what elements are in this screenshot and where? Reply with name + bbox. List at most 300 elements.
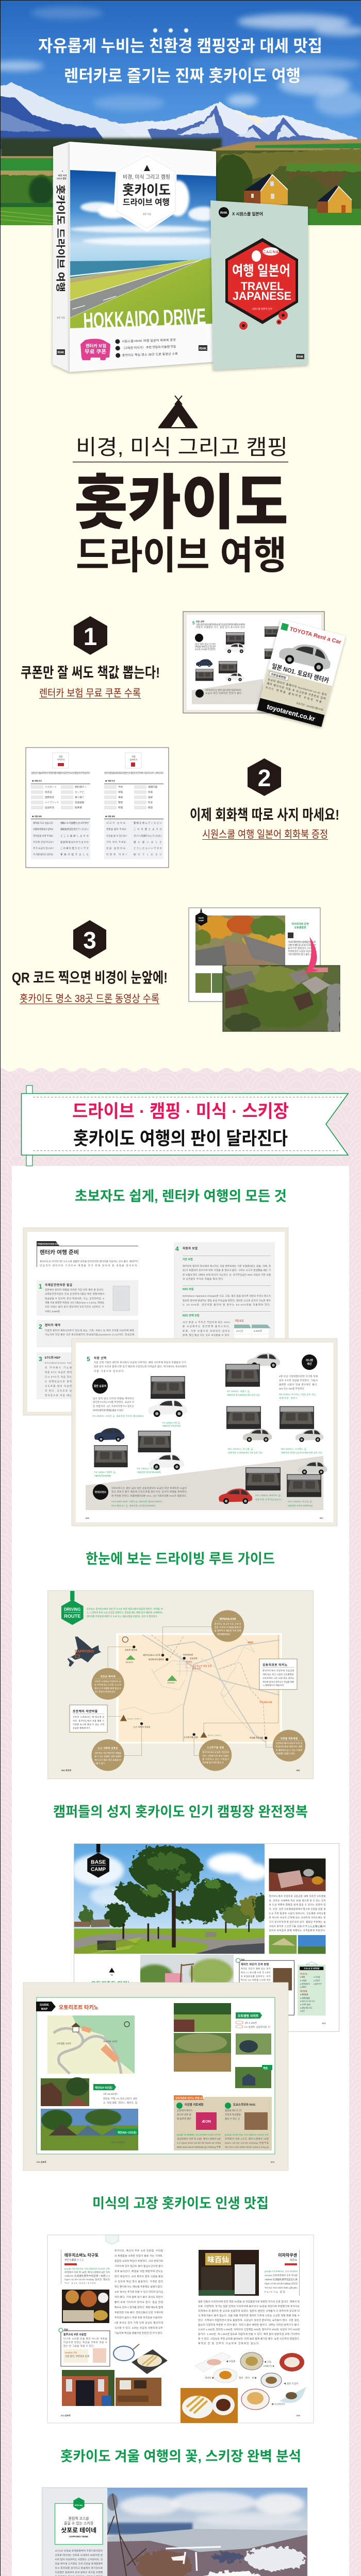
pink patterned section: [0, 1068, 361, 2576]
area map: [116, 1633, 282, 1743]
section 2: 2: [39, 1323, 42, 1330]
red hexagon: こんにちは: [263, 250, 278, 254]
book page preview: 차종 선택: [196, 620, 204, 623]
page title: [37, 1241, 138, 1267]
area map: 스스키노의 맛집 밀집: [192, 1664, 212, 1667]
right text block: 할 수 있다. 사장님의 추천 요리를 물어보자. 지역 술과 함께 즐기면 좋다. 늦은 시간까지 영업한다.: [198, 2337, 300, 2341]
spread preview: 追加料金: [45, 806, 55, 809]
left restaurant title: Open 11:00~15:00 Holiday 일요일, 월요일: [64, 2278, 110, 2281]
section 4 insurance: 가입 요금: [235, 1319, 243, 1323]
compact car group: 짐이 많지 않고 단거리 여행을 계획하고: [93, 1397, 134, 1400]
compact car group: P3 1500cc 아반떼 급,: [137, 1467, 161, 1470]
auto camping site info: [235, 2012, 272, 2088]
tip box: 이용하면 맛있는 튀김을 무료로 먹을 수: [63, 2341, 107, 2344]
compact car group: 있다면 P1이나 P2를 추천한다. 요금이 가: [93, 1400, 135, 1404]
body text: 만 아니라 서로가 근처에 있는 프라이빗 사이트에도 잔: [269, 1916, 325, 1920]
section 4 insurance: 사고 발생 시 무조건 부담하게 되는 NOC: [183, 1320, 231, 1324]
compact car group: 되어야 편하게 여행을 즐길 수 있다.: [93, 1409, 124, 1412]
area map: 스즈란구릉 공원: [184, 1735, 198, 1738]
section 4 insurance: NOC(None Operation Charge)란 사고, 고장, 펑크 등을 일으켜 차량의 수리나 청소가: [183, 1294, 271, 1298]
driving route map page: 063: [297, 1769, 300, 1772]
shop exterior photo: [62, 2370, 161, 2406]
section 2: 가능하며 가장 좋은 것은 토요타렌터카 한국대리점(toyotarent.co.kr)이다. 한국인에: [45, 1333, 134, 1336]
section 4 insurance: 토해, 기본 보험으로 커버되지 않아도: [183, 1329, 230, 1333]
guide map label: MAP: [41, 2008, 47, 2011]
tip box: 블루스틱 쿠폰 사용법: [63, 2333, 87, 2336]
area map: 테우치소바노 타구토: [143, 1653, 161, 1656]
section 4 insurance: 8,300엔: [254, 1329, 262, 1332]
flowers: [239, 311, 288, 330]
section 2: [37, 1320, 138, 1347]
cover feature list: 시원스쿨×RHK 여행 일본어 회화북 증정: [122, 338, 176, 344]
nearby recommendation panel: 도요스쿠모아 HUG: [233, 2103, 255, 2107]
hybrid band: HV4 제네시스 급, 대표차량 크라운(CROWN): [111, 1504, 156, 1507]
section 4 insurance: 자동차 보험: [183, 1246, 198, 1250]
auto camping site info: 1박 4,100엔: [244, 2021, 257, 2025]
driving route badge: DRIVING: [64, 1607, 80, 1612]
spread preview: 추가 요금이 있나요?: [33, 846, 54, 850]
info box: Auto Resort Takino: 홋카이도에서 유일하게 국립공원: [262, 1669, 294, 1672]
spread preview: 렌터카를 빌릴 때 보험과 관련된 단어를 알아두면 매우 유용하다 반드시 확인하자: [104, 771, 164, 775]
facilities panel: ● 매점: [300, 1976, 305, 1978]
title block: [73, 396, 288, 577]
callout circle: Suzuran park: 를 마련하고 있는 가족들이: [202, 1757, 229, 1760]
spread preview: 가득 넣어 주세요.: [106, 840, 127, 844]
tip box: Monthly 쿠폰: [65, 2351, 77, 2354]
left column text: 적인 편이며 어느 메뉴를 주문해도 실패가 없다.: [114, 2285, 163, 2289]
info box: Auto Resort Takino: 삿포로에서 시로 30분 정도 걸리는: [262, 1676, 294, 1680]
compact car group: 대표차량 탱크(TANK): [94, 1474, 111, 1478]
section 1: 국제운전면허증 발급: [45, 1283, 72, 1287]
info box: Jozankei village: 삿포로 시내에서는 꽤 멀리에 있: [73, 1715, 105, 1718]
spread preview: ◆ 여행 회화: [105, 815, 116, 818]
section 1: 일본에서 렌터카 여행을 하려면 가장 먼저 해야 할 일이다.: [45, 1288, 104, 1292]
minivan group: W3 2400cc 스타렉스 급,: [281, 1447, 307, 1451]
right restaurant door photo: [199, 2250, 259, 2296]
publisher mark: RHK: [220, 211, 227, 215]
publisher mark: X 시원스쿨 일본어: [232, 211, 263, 216]
left column text: 의 특별함을 내세운 맛집이 줄을 서는 가게로,: [114, 2254, 163, 2258]
section 1: 개월 이내 촬영한 여권용 사진 1매(3.5cm x 4.5cm), 여권용: [45, 1301, 104, 1304]
rental car flyer: 일본 NO1. 토요타 렌터카: [271, 662, 330, 684]
Teine title box: 삿포로 테이네: [61, 2527, 96, 2534]
facilities panel: ● 바베큐용품: [300, 1996, 310, 1999]
sub heading: 홋카이도 명소 38곳 드론 동영상 수록: [20, 993, 159, 1005]
left restaurant title: Address 北海道札幌市中央区南一条西 2-2: [64, 2274, 110, 2278]
section 4 insurance: 과 상관없이 추가로 지불을 해야 한다.: [183, 1277, 224, 1281]
callout circle: Aeon mall: 장 예정에서 살 수 있는 다양한: [276, 1748, 303, 1751]
banner line 2: 홋카이도 여행의 판이 달라진다: [73, 1129, 288, 1149]
left column text: [114, 2249, 163, 2335]
minivan group: W2 2000cc 카니발 급,: [228, 1447, 254, 1451]
callout circle: Sapporo Teine: 삿포로 테이네: [101, 1675, 116, 1679]
hexagon number 1: [74, 616, 107, 655]
hybrid band: HV3 2400 2500 그랜저 급, 대표차량 캠리(CAMRY): [111, 1500, 162, 1503]
park photo: [71, 1844, 268, 1954]
page title: 홋카이도의 아기자기한 소도시와 광활한 자연을 만끽하려면 렌터카를 이용하는 것이 좋다. 예약부터: [40, 1260, 138, 1263]
right restaurant info: Tel 011-716-1000 Web ajihyaku: [265, 2286, 298, 2289]
callout circle: Teuchi soba: 을 제작하기 때문에 하루 판매: [215, 1629, 241, 1632]
body text: [269, 1894, 325, 1933]
spread preview: ◆ 여행 회화: [32, 815, 42, 818]
compact car group: 장 저렴하다. 4인 가족이라면 P4 정도는: [93, 1404, 134, 1408]
body text: 홋카이도에서 유일하게 국립공원 내에 자리한 오토캠핑: [269, 1894, 325, 1898]
nearby recommendation panel: google 42.828055, 141.674505 Access 신치토: [177, 2133, 221, 2137]
hexagon number 3: 3: [83, 927, 96, 954]
page background cream: [0, 0, 361, 1077]
restaurant page: 075: [297, 2414, 300, 2417]
book spine: 홋카이도 드라이브 여행: [55, 184, 65, 292]
spread preview: ハイブリッド: [45, 801, 59, 804]
left restaurant title: [61, 2235, 119, 2284]
izakaya dishes: 청어 · 연어 · 게 ▶: [239, 2376, 257, 2380]
info box: Jozankei village: 키장을 동시에 즐길 수 있는 거의: [73, 1723, 105, 1726]
left column text: 홋카이도, 특산의 우유 소바 전문점. 수타법: [114, 2249, 163, 2252]
page with autumn photo: BASE: [199, 917, 204, 919]
minivan group: 량이 우수한 차량을 추천한다. 거동이: [279, 1379, 318, 1382]
callout circle: Aeon mall: [273, 1730, 305, 1761]
page with autumn photo: CAMP: [199, 920, 204, 922]
small photos: [269, 1935, 325, 1954]
hexagon number 1: 1: [84, 623, 97, 651]
izakaya dishes: ◀ 삶은 오징어: [284, 2382, 298, 2385]
book page preview: P1이나 P2를 추천한다: [195, 648, 216, 651]
book: Travel Japanese: RHK: [297, 355, 304, 359]
spread preview: 어떻게 하죠?: [106, 853, 127, 856]
section 3: 지 된다. 고속도로 등: [45, 1389, 72, 1393]
nearby recommendation panel: 때 들르면 좋은: [177, 2117, 191, 2121]
section 2: 다양한 렌터카 예약사이트가 있는데 성능, 가격, 서비스 등 여러 가지를 비교하여 예약: [45, 1329, 135, 1332]
guide map page: 073: [271, 2161, 274, 2163]
section 1: 1: [39, 1283, 42, 1290]
callout circle: Aeon mall: 때 들르면 좋은 대형 마트. 캠핑: [276, 1745, 303, 1748]
chalet photo 1: [41, 2077, 89, 2106]
cover title hexagon: [115, 156, 175, 230]
book page preview: 짐이 많지 않고 단거리: [195, 642, 216, 646]
callout circle: North Safari: 할 수 있는 동물원. 일반 동물원: [94, 1755, 121, 1758]
nearby recommendation panel: Web www.aeon-hokkaido.jp Parking 무료: [177, 2146, 221, 2149]
chalet label: 고, 취침 램프, 테라스, 베란다, 침: [103, 2101, 137, 2105]
heading: campsites: 캠퍼들의 성지 홋카이도 인기 캠핑장 완전정복: [53, 1804, 308, 1820]
section 4 insurance: 손)가 포함되어 있으므로 따로 가입을 할 필요가 없다. 그러나 사고가 발생했을 때는 기: [183, 1268, 271, 1272]
chalet label: 1박 15,840엔~: [103, 2092, 118, 2096]
cover feature list: 홋카이도 핵심 명소 38곳 드론 동영상 수록: [122, 352, 178, 358]
vehicle selection page: 016: [86, 1517, 89, 1519]
coupon badge: 무료 쿠폰: [85, 349, 106, 355]
driving route badge: ROUTE: [64, 1614, 80, 1619]
right restaurant info: 味百仙: [290, 2258, 297, 2262]
teapot and tempura: [113, 2344, 168, 2374]
base camp page: [71, 1843, 339, 2031]
rental car flyer: [257, 619, 346, 727]
compact car group: 대표차량 비츠(VITZ): [162, 1424, 181, 1428]
cover feature list: [115, 337, 207, 358]
restaurant page: 074 삿포로: [61, 2414, 71, 2417]
right restaurant door photo: 味百仙: [207, 2256, 229, 2264]
hero headline: 자유롭게 누비는 친환경 캠핑장과 대세 맛집: [38, 37, 322, 55]
callout circle: Sapporo Teine: 있는 절호의 위치에 있다.: [94, 1690, 116, 1693]
right text block: [198, 2300, 300, 2345]
book page preview: 자동차 모델명과 크기, 정원 등이 표시되어 있다: [196, 625, 245, 629]
callout circle: Suzuran park: [199, 1739, 232, 1771]
spread preview: 免責: [148, 790, 153, 794]
section 3: ETC와 HEP: [45, 1355, 60, 1360]
hybrid band: 하이브리드: [94, 1490, 107, 1494]
section 4 insurance: 4: [175, 1245, 179, 1252]
intro text: 스, 노면전차 등이 도심 곳곳을 연결하고, 혼잡할 때도 제법 많기 때문에 시내에서는: [87, 1611, 163, 1615]
ski resort page: [42, 2487, 311, 2576]
spread preview: 검색하기: [130, 758, 138, 761]
callout circle: Sapporo Teine: 행과 스키 여행을 함께 즐길 수: [94, 1686, 121, 1689]
spread preview: 사고가 났어요.: [106, 821, 127, 825]
intro text: 차종 선택 기준은 렌터카 회사마다 조금씩 다르지만, 예약 사이트에 자동차 모델명과 크기,: [94, 1361, 187, 1364]
rental car flyer: 유효기간 : 2019년 6월 30일: [296, 701, 323, 712]
area map: 기타히로시마: [259, 1700, 272, 1703]
sub heading: 렌터카 보험 무료 쿠폰 수록: [39, 687, 141, 699]
feature 2: phrase book: [26, 748, 339, 868]
left column text: 수 있으며 튀김 역시 훌륭하다. 가격은 합리: [114, 2280, 163, 2283]
body text: 디가 골고루하게 잘 정돈되어 있다. 캠핑장 주변에는 놀: [269, 1920, 325, 1924]
section 4 insurance: 대부분의 렌터카 회사에서 제시하는 차량 렌트비에는 기본 보험료(대인, 대물, 차체, 자: [183, 1264, 271, 1268]
nearby recommendation panel: 1-2 Open 9:00~21:00 Tel 0123-24-3700: [177, 2142, 221, 2144]
spread preview: 예약을 하고 싶습니다.: [33, 821, 54, 825]
section 4 insurance: NOC 비용: [183, 1287, 194, 1291]
body text: 라 도심 여행과 캠핑을 쉽게 즐길 수 있다는 장점이 있: [269, 1903, 325, 1907]
red hexagon: 시원스쿨 일본어 감수: [252, 307, 272, 311]
info box: Auto Resort Takino: 시 캠핑장이기 때문이다.: [262, 1684, 285, 1687]
page with autumn photo: [189, 908, 320, 1002]
spread preview: 이 차를 빌리고 싶어요.: [33, 853, 54, 856]
body text: 삿포로 테이네는 삿포로 시내에서 40분이면 갈: [55, 2553, 103, 2557]
book spine: ▲: [61, 170, 63, 172]
hero headline: 렌터카로 즐기는 진짜 홋카이도 여행: [64, 66, 301, 85]
rental car flyer: NOC 면책을 클릭하면 무료로 적용: [265, 685, 322, 704]
section 4 insurance: 기본 보험: [183, 1258, 193, 1261]
restaurant page: [47, 2235, 314, 2423]
spread preview: 料金: [148, 801, 153, 804]
book front cover: [70, 142, 216, 372]
spread preview: 길을 잃었어요.: [106, 846, 127, 850]
spread preview: 保険: [118, 790, 123, 794]
spread preview: 事故: [118, 795, 123, 799]
spread preview: 修理: [118, 806, 123, 809]
section 4 insurance: 를 보상해주는 완전면책 플러스이다.: [183, 1325, 230, 1328]
izakaya dishes: 고래베이컨 ▶: [263, 2365, 275, 2367]
callout circle: Suzuran park: 하루를 즐기기에 좋은 곳: [202, 1761, 224, 1764]
cover title hexagon: 홋카이도: [122, 182, 171, 198]
spread preview: 보험에 대해 묻고 싶어요.: [33, 827, 54, 831]
hybrid band: HV2 2000cc 쏘나타 급,: [288, 1500, 313, 1503]
Teine title box: SAPPORO-TEINE: [69, 2535, 88, 2538]
Hokkaido silhouette: [68, 1637, 101, 1667]
right restaurant info: Access 삿포로역에서 도보 약 5분: [265, 2274, 298, 2277]
cover title hexagon: 봉윤 지음: [143, 212, 151, 215]
area map: 삿포로 테이네: [125, 1648, 137, 1651]
right photos: [174, 2003, 231, 2072]
book page preview: 요금이 약간 비싸지만 연비가 좋다: [205, 691, 242, 695]
site illustration map: 프라이빗 사이트: [103, 2040, 118, 2043]
compact car group: [92, 1376, 187, 1478]
area map: 마코마나이 렌터카: [149, 1657, 164, 1660]
callout circle: Sapporo Teine: 삿포로 시내에서 차량으로 40: [94, 1680, 122, 1683]
area map: 모이와야마: [168, 1681, 175, 1684]
spread preview: [26, 748, 169, 868]
area map: 밀집 구역: [192, 1667, 201, 1670]
area map: 이자하쿠센: [183, 1653, 193, 1656]
page title: 반납까지 렌터카로 드라이브 여행을 하기 위해 알아야 할 과정을 알아보자.: [40, 1264, 138, 1267]
spread preview: 발음: [59, 755, 63, 758]
page with autumn photo: 히사리가와 온천: [291, 922, 309, 926]
guide map page: [23, 1982, 288, 2171]
lower playground photo: [140, 1955, 234, 1982]
nearby recommendation panel: [174, 2095, 272, 2150]
minivan group: 왜건: [307, 1362, 312, 1366]
tip box: 있는 번 그림을 먹을 수 있다.: [63, 2344, 94, 2348]
section 3: ETC(Electronic Toll: [45, 1362, 72, 1364]
callout circle: Teuchi soba: 홋카이도 최고의 우유 소바 전: [215, 1622, 241, 1625]
spread preview: ◆ 여행 단어: [32, 779, 42, 782]
izakaya dishes: 야마모 ▶: [205, 2376, 215, 2380]
left column text: 길게 늘어선다. 메밀을 직접 제분하여 만드는: [114, 2269, 163, 2273]
spread preview: どうしたらいいですか: [134, 846, 162, 850]
tip box: [59, 2328, 110, 2366]
tip box: 게이트 차단기 옆에 있는 장치: [241, 1967, 271, 1970]
callout circle: North Safari: 나볼 수 있다.: [94, 1761, 105, 1765]
right restaurant info: [265, 2250, 300, 2296]
section 3: 는 정액요금으로 홋카: [45, 1380, 72, 1383]
cover title hexagon: 드라이브 여행: [123, 197, 170, 207]
intro text: [87, 1355, 187, 1373]
clouds: [0, 7, 361, 116]
tent icon and title: 01: [110, 1973, 113, 1976]
facilities panel: ● 샤워장: [300, 1979, 306, 1981]
callout circle: Aeon mall: 공항에서 메이스센으로 바로 갈: [276, 1741, 303, 1744]
info box: Auto Resort Takino: 위치에 있어서 찾아오는 손님들 위한: [262, 1680, 294, 1683]
compact car group: P1 1300cc 5인 급,: [162, 1421, 180, 1424]
book page preview: 하이브리드는 같은 급의 일반 승용차보다: [205, 688, 242, 692]
minivan group: 대표차량 알파드(ALPHARD) 8명 승차 가능: [281, 1451, 322, 1454]
nearby recommendation panel: 캠핑을 떠나기 전: [225, 2109, 241, 2112]
auto camping site info: 캐슬: [263, 2066, 268, 2070]
main title line 2: 드라이브 여행: [76, 534, 287, 577]
spread preview: 確認: [148, 806, 153, 809]
intro text: 렌터카를 주차장에 세워두고 도보 또는 대중교통을 이용하는 것이 더 편리하다.: [87, 1615, 158, 1618]
callout circle: Aeon mall: 이온몰 치토세점: [281, 1737, 298, 1740]
tip box: 인원 맞이, 쿠폰정보 등록: [65, 2354, 89, 2358]
izakaya dishes: ◀ 오사카카츠: [271, 2402, 285, 2406]
guide map page: 072 삿포로: [37, 2160, 46, 2163]
info box: Jozankei village: [70, 1705, 107, 1732]
mountains: [0, 82, 361, 157]
base camp badge: [87, 1844, 109, 1878]
sub heading: 시원스쿨 여행 일본어 회화북 증정: [202, 828, 328, 840]
nearby recommendation panel: 세공항에서 차로 약 10분, 메이스센에서 5분: [177, 2137, 221, 2141]
rental car flyer: 토요타 렌터카 홈페이지 toyotarent.co.kr 접속: [267, 677, 327, 697]
section 4 insurance: 는 20,000엔, 견인차를 불러야 할 경우는 50,000엔을 지불해야 한다.: [183, 1303, 271, 1307]
base camp page: 071: [322, 2022, 326, 2024]
chalet label: 캐빈S(4~5인용): [95, 2086, 112, 2090]
connector lines: [107, 1627, 273, 1756]
callout circle: North Safari: 에서 보기 힘든 희귀 동물을 만: [94, 1758, 121, 1761]
spread preview: 경찰을 불러 주세요.: [106, 827, 127, 831]
left column text: 식사할 수 있다. 소바는 차갑게, 따뜻하게 모두: [114, 2326, 163, 2330]
page with autumn photo: 히사리가와 온천은 시골에 있는 온천으로: [288, 940, 316, 944]
spread preview: 予約: [118, 785, 123, 789]
body text: 당시 회전대를 설치하고 봉슬레이 경기장으로: [55, 2566, 103, 2570]
chalet photo 2: [41, 2109, 138, 2150]
spread preview: 警察を呼んでください: [134, 821, 162, 825]
body text: 거리가 풍부한 스즈란구릉 공원(すずらん丘陵公園)이: [269, 1924, 325, 1928]
tip box: 타구토 소바를 맛볼 뿐만 아니라 쿠폰을: [63, 2337, 107, 2341]
hybrid band: 하이브리드는 같은 급의 일반 승용차량보다 요금이 약간 비싸지만 소음이: [111, 1486, 187, 1490]
spread preview: この車を借りたいです: [60, 846, 89, 850]
section 4 insurance: 본 보험의 한도 내에서 손해 처리가 가능하다. 단, 자기부담금인 NOC 비용은 기본 보험: [183, 1273, 271, 1277]
spread preview: 事故が起きました: [60, 853, 89, 856]
body text: 장. 삿포로 시내에서 차로 40분 정도면 갈 수 있는 곳이: [269, 1899, 325, 1902]
sky: [0, 0, 361, 225]
nearby recommendation panel: ÆON: [202, 2120, 211, 2124]
right restaurant info: Parking 없음: [265, 2290, 285, 2294]
tip box: TIP: [241, 1958, 244, 1961]
cover feature list: 〈고독한 미식가〉 추천 맛집과 미슐랭 맛집: [122, 345, 176, 350]
info box: Auto Resort Takino: [259, 1659, 297, 1689]
facilities panel: ● 캠핑용품: [300, 1993, 308, 1996]
minivan group: 불편한 사람이 있을 경우에도 좋다.: [279, 1383, 318, 1386]
callout circle: Teuchi soba: 문점. 오로지 수타법을 통해 면: [215, 1625, 241, 1629]
driving route map page: [48, 1590, 314, 1779]
facilities panel: ● 전동 연장 코드: [300, 2006, 313, 2009]
vehicle selection page: 017: [320, 1517, 323, 1519]
hero headline: [38, 28, 322, 85]
spread preview: 이것을 쓸 수 있나요?: [106, 834, 127, 838]
nearby recommendation panel: Open 10:00~19:00 Holiday 연중무휴: [225, 2141, 269, 2145]
left restaurant title: google 43.037116, 141.295103 Access 삿포: [64, 2267, 110, 2270]
nearby recommendation panel: 공항에서 메이스: [177, 2109, 193, 2112]
hexagon number 3: [73, 920, 106, 959]
intro text: [87, 1607, 163, 1618]
intro text: 차종 선택: [94, 1356, 106, 1360]
compact car group: 대표차량 필더(FIELDER): [137, 1470, 161, 1474]
book spine: RHK: [58, 351, 64, 354]
callout circle: Teuchi soba: 량이 한정되어 있다.: [217, 1632, 231, 1635]
auto camping site info: 오토캠핑 사이트: [238, 2014, 259, 2018]
coupon badge: [80, 339, 110, 360]
nearby recommendation panel: 로역에서 차로 1시간, 메이스센에서 10분: [225, 2137, 269, 2141]
cover title hexagon: 비경, 미식 그리고 캠핑: [123, 174, 170, 180]
left restaurant title: 手打ち蕎麦 たぐと: [64, 2258, 84, 2262]
right text block: 시사모 1,200엔, 연어회 1,000엔, 야마이모 간장절임 600엔, 청어구이 800엔, 오징어 구이 900엔: [198, 2328, 300, 2331]
Teine title box: SPECIAL: [74, 2504, 84, 2506]
right text block: 찜요리 다양하게 주문할 수 있어 좋다. 자리가 좁아 예약은 필수다. 내부는 작지만 분위기가 좋다.: [198, 2323, 300, 2327]
feature 1: coupon: [21, 612, 346, 727]
drone video frame: [223, 961, 340, 1032]
tip box: TIP: [64, 2329, 68, 2332]
minivan group: 대표차량 위시(WISH) 6명 승차 가능: [227, 1393, 260, 1397]
spread preview: 国際免許: [45, 795, 55, 799]
spread preview: 道に迷いました: [134, 840, 162, 844]
nearby recommendation panel: 지역의 특산품을: [225, 2113, 241, 2116]
info box: Auto Resort Takino: 오토리조트 타키노: [262, 1663, 288, 1667]
heading: restaurants: 미식의 고장 홋카이도 인생 맛집: [92, 2196, 269, 2211]
section 3: 의 하이패스 기능을: [45, 1366, 72, 1369]
callout circle: Teuchi soba: [211, 1610, 244, 1642]
left column text: 면이 특징이다. 소바 특유의 향과 식감을 즐길: [114, 2275, 163, 2278]
heading: 쿠폰만 잘 써도 책값 뽑는다!: [21, 665, 160, 681]
intro text: 정원 등이 사진과 함께 나와 있기 때문에 구입하는데 어려움은 없다. 여기에서는 토요타렌터: [94, 1365, 187, 1368]
base camp badge: CAMP: [91, 1867, 106, 1872]
tent icon and title: [91, 1968, 133, 1986]
hybrid band: [86, 1456, 327, 1510]
